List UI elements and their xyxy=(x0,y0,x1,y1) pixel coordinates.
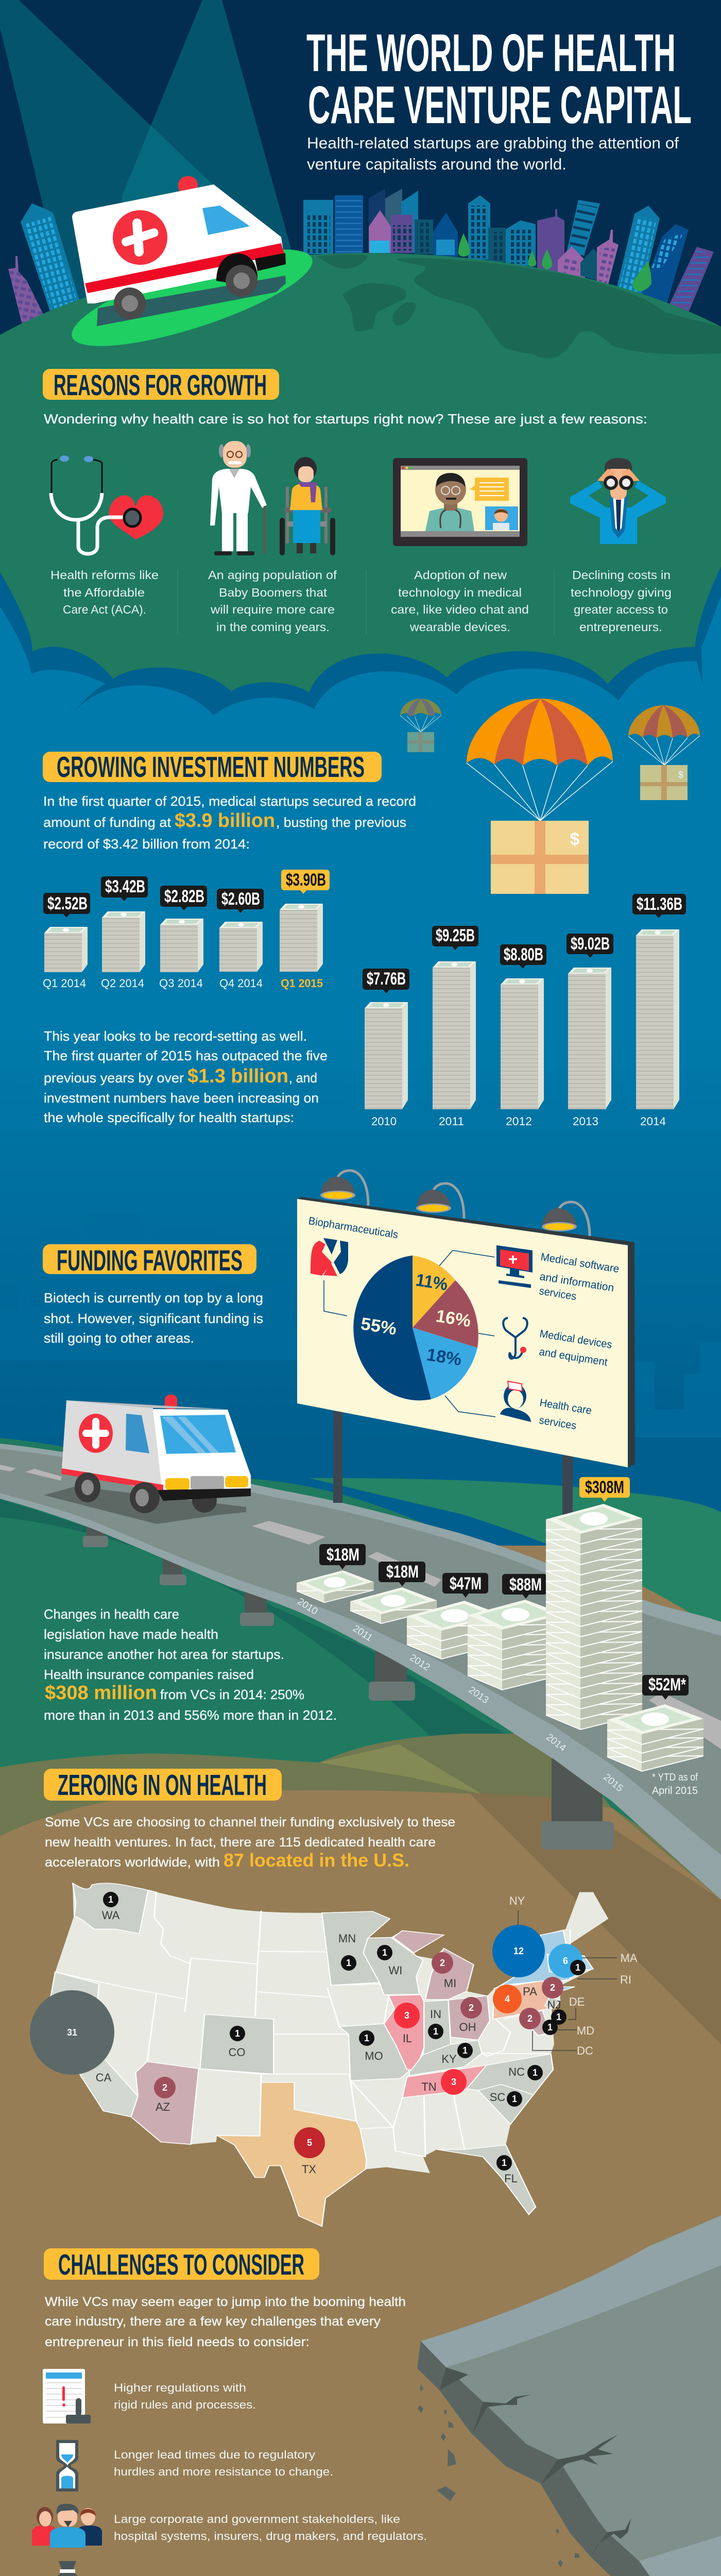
chart: annual funding stacks: 2010 xyxy=(371,1115,397,1128)
chart: annual funding stacks: 2012 xyxy=(506,1115,532,1128)
text: stakeholders: Large corporate and government stakeholders, like xyxy=(114,2513,400,2526)
paragraph: 87 located in the U.S. xyxy=(224,1850,409,1871)
text: regulations: rigid rules and processes. xyxy=(114,2398,256,2411)
state count bubbles: 1 xyxy=(502,2158,507,2168)
heading badge xyxy=(43,751,382,784)
heading badge: CHALLENGES TO CONSIDER xyxy=(58,2248,304,2281)
section: reasons for growth xyxy=(43,369,672,634)
chart: annual funding stacks xyxy=(363,894,686,1128)
section: growing investment numbers xyxy=(43,699,700,1128)
paragraph 1: In the first quarter of 2015, medical startups secured a record xyxy=(43,793,416,809)
state labels xyxy=(96,1894,638,2185)
state count bubbles: 1 xyxy=(364,2033,369,2043)
state count bubbles: 1 xyxy=(575,1962,580,1973)
bubble 52M: $52M* xyxy=(648,1675,686,1694)
text: lead times: hurdles and more resistance to change. xyxy=(114,2465,333,2478)
section: zeroing in on health xyxy=(30,1769,638,2226)
text: lead times: Longer lead times due to regulatory xyxy=(114,2448,315,2461)
paragraph: insurance funding: more than in 2013 and 556% more than in 2012. xyxy=(44,1707,337,1723)
stack 2012 xyxy=(407,1601,503,1659)
state labels: DE xyxy=(569,1995,585,2008)
intro text: Wondering why health care is so hot for startups right now? These are just a few reasons: xyxy=(44,411,647,427)
bubble 18M second xyxy=(379,1562,425,1586)
label: biopharmaceuticals xyxy=(307,1215,399,1276)
pillars under road xyxy=(83,1522,614,1850)
state labels: IN xyxy=(430,2008,441,2021)
reason captions: will require more care xyxy=(210,603,335,616)
icon: hourglass xyxy=(56,2440,78,2492)
paragraph 1: , busting the previous xyxy=(276,815,406,830)
paragraph: new health ventures. In fact, there are 115 dedicated health care xyxy=(45,1835,436,1850)
chart: annual funding stacks: $7.76B xyxy=(367,969,406,989)
label: medical devices: Medical devices xyxy=(539,1328,613,1351)
paragraph 1: $3.9 billion xyxy=(175,810,275,832)
panel: reasons background green xyxy=(0,361,721,721)
continents xyxy=(317,255,721,356)
falling rock debris xyxy=(418,2384,580,2567)
paragraph: insurance funding: from VCs in 2014: 250% xyxy=(160,1687,304,1702)
state count bubbles: 1 xyxy=(547,2022,553,2032)
pie chart: 55% xyxy=(359,1314,398,1339)
state count bubbles: 5 xyxy=(307,2138,312,2148)
state count bubbles: 3 xyxy=(404,2010,409,2021)
lamps xyxy=(320,1171,590,1237)
state labels: AZ xyxy=(156,2100,170,2113)
paragraph xyxy=(45,1815,455,1871)
state count bubbles: 4 xyxy=(505,1994,510,2004)
road xyxy=(0,1444,721,1900)
chart: quarterly funding stacks: $2.60B xyxy=(221,889,260,909)
reason captions: Care Act (ACA). xyxy=(63,603,146,616)
paragraph: care industry, there are a few key challenges that every xyxy=(45,2314,381,2329)
state labels: WI xyxy=(389,1964,402,1977)
bubble 88M xyxy=(502,1574,547,1599)
state labels: MI xyxy=(444,1977,456,1990)
cloud scallops dark layer xyxy=(0,567,721,747)
cliff: broken road xyxy=(417,2215,721,2576)
chart: quarterly funding stacks: Q2 2014 xyxy=(101,977,144,990)
paragraph 2: $1.3 billion xyxy=(187,1065,288,1087)
state labels: RI xyxy=(620,1973,631,1986)
chart: annual funding stacks: 2013 xyxy=(573,1115,598,1128)
chart: quarterly funding stacks: Q1 2015 xyxy=(281,977,323,990)
bubble 47M: $47M xyxy=(450,1574,482,1594)
state labels: MD xyxy=(577,2024,594,2037)
text: lead times xyxy=(114,2448,333,2478)
paragraph: insurance funding: $308 million xyxy=(45,1682,157,1704)
chart: quarterly funding stacks: $3.42B xyxy=(105,877,145,896)
state count bubbles: 2 xyxy=(162,2082,167,2093)
heading badge: FUNDING FAVORITES xyxy=(57,1244,243,1277)
label: medical software: and information xyxy=(539,1270,615,1294)
paragraph: Biotech is currently on top by a long xyxy=(44,1290,263,1306)
title xyxy=(306,23,692,134)
bubble 47M xyxy=(442,1573,488,1598)
state labels: MN xyxy=(338,1932,356,1945)
paragraph 1 xyxy=(43,793,416,852)
heading badge: GROWING INVESTMENT NUMBERS xyxy=(57,751,365,784)
pie chart: 16% xyxy=(435,1306,472,1331)
state labels: DC xyxy=(577,2044,593,2057)
state count bubbles xyxy=(30,1892,586,2171)
year labels on road: 2011 xyxy=(351,1623,374,1643)
text: regulations: Higher regulations with xyxy=(114,2381,246,2394)
reason captions: technology in medical xyxy=(398,586,522,599)
stack 2014 xyxy=(546,1504,642,1730)
heading badge: ZEROING IN ON HEALTH xyxy=(58,1769,267,1802)
stack 2010 xyxy=(297,1570,374,1602)
icon: video chat tablet xyxy=(393,458,527,546)
billboard xyxy=(297,1171,635,1515)
icon: money bag xyxy=(46,2561,88,2576)
ambulance on road xyxy=(44,1395,251,1524)
label: medical software: services xyxy=(538,1285,577,1302)
heading badge xyxy=(44,2248,319,2281)
state labels: FL xyxy=(504,2172,518,2185)
state count bubbles: 1 xyxy=(556,2012,561,2022)
state labels: NY xyxy=(509,1894,525,1907)
section: challenges to consider xyxy=(32,2215,721,2576)
paragraph: shot. However, significant funding is xyxy=(44,1311,263,1326)
city skyline right xyxy=(303,189,714,312)
reason captions: in the coming years. xyxy=(216,620,330,634)
paragraph: entrepreneur in this field needs to consider: xyxy=(45,2335,310,2349)
parachute small left xyxy=(400,699,441,752)
chart: quarterly funding stacks: $2.82B xyxy=(164,887,204,906)
state count bubbles: 2 xyxy=(469,2003,474,2013)
state labels: OH xyxy=(459,2021,476,2033)
state labels: TN xyxy=(421,2080,437,2093)
paragraph: Some VCs are choosing to channel their funding exclusively to these xyxy=(45,1815,455,1829)
text: regulations xyxy=(114,2381,256,2411)
state labels: MA xyxy=(620,1952,638,1964)
paragraph 2: previous years by over xyxy=(44,1070,184,1086)
paragraph: insurance funding xyxy=(44,1606,337,1723)
bubble 88M: $88M xyxy=(509,1575,542,1595)
state labels: NJ xyxy=(547,1998,561,2011)
year labels on road xyxy=(296,1596,625,1794)
state count bubbles: 1 xyxy=(108,1894,113,1905)
label: health care services xyxy=(500,1381,593,1432)
state labels: TX xyxy=(302,2163,316,2176)
state labels: WA xyxy=(102,1909,120,1922)
stack 2015 xyxy=(607,1704,703,1771)
state labels: SC xyxy=(490,2091,505,2104)
heading badge xyxy=(43,1244,256,1277)
reason captions: Health reforms like xyxy=(50,568,159,582)
reason captions: greater access to xyxy=(574,603,668,616)
state labels: CA xyxy=(96,2071,112,2084)
label: medical software: Medical software xyxy=(540,1251,620,1275)
state count bubbles: 1 xyxy=(433,2026,438,2037)
paragraph: insurance funding: insurance another hot area for startups. xyxy=(44,1647,284,1662)
reason captions xyxy=(50,568,672,634)
chart: annual funding stacks: $8.80B xyxy=(504,945,543,964)
sky blue background xyxy=(0,596,721,1546)
reason captions: technology giving xyxy=(571,586,672,599)
footnote xyxy=(652,1772,698,1797)
chart: annual funding stacks: $9.25B xyxy=(436,926,475,945)
state count bubbles: 2 xyxy=(440,1958,445,1968)
paragraph 2: This year looks to be record-setting as well. xyxy=(44,1028,307,1044)
year labels on road: 2012 xyxy=(408,1652,432,1673)
parachute small right xyxy=(628,705,700,800)
label: biopharmaceuticals: Biopharmaceuticals xyxy=(307,1215,399,1241)
chart: quarterly funding stacks: Q1 2014 xyxy=(43,977,86,990)
icon: stakeholders xyxy=(32,2504,102,2548)
icon: regulations document xyxy=(43,2369,91,2424)
state count bubbles: 3 xyxy=(451,2077,456,2087)
section: funding favorites xyxy=(43,1244,263,1346)
text: stakeholders xyxy=(114,2513,427,2543)
reason captions: Declining costs in xyxy=(572,568,671,582)
hills above road xyxy=(0,1438,721,1958)
bubble 308M: $308M xyxy=(585,1478,624,1497)
label: health care services: Health care xyxy=(539,1397,593,1417)
paragraph 2: investment numbers have been increasing on xyxy=(44,1090,319,1106)
reason captions: Baby Boomers that xyxy=(219,586,328,599)
reason captions: Adoption of new xyxy=(414,568,507,582)
pie chart xyxy=(353,1256,478,1400)
text: stakeholders: hospital systems, insurers, drug makers, and regulators. xyxy=(114,2530,427,2543)
paragraph: accelerators worldwide, with xyxy=(45,1855,220,1870)
lower ground: olive and brown hills xyxy=(0,1499,721,2576)
paragraph 2: , and xyxy=(289,1070,317,1086)
parachute large xyxy=(467,699,613,894)
footnote: April 2015 xyxy=(652,1785,698,1797)
subtitle: Health-related startups are grabbing the attention of xyxy=(307,134,679,152)
city silhouette behind billboard xyxy=(0,1214,721,1437)
state count bubbles: 2 xyxy=(550,1982,555,1993)
bubble 18M second: $18M xyxy=(386,1562,419,1582)
year labels on road: 2015 xyxy=(602,1772,625,1794)
chart: annual funding stacks: 2011 xyxy=(439,1115,464,1128)
paragraph: insurance funding: legislation have made health xyxy=(44,1626,218,1642)
paragraph: still going to other areas. xyxy=(44,1330,194,1346)
state count bubbles: 1 xyxy=(512,2094,517,2104)
city skyline left xyxy=(8,204,80,325)
paragraph: insurance funding: Health insurance companies raised xyxy=(44,1667,254,1682)
chart: annual funding stacks: 2014 xyxy=(640,1115,666,1128)
parachute large: $ xyxy=(570,829,580,849)
parachute small right: $ xyxy=(678,770,683,780)
subtitle: venture capitalists around the world. xyxy=(307,155,566,173)
chart: annual funding stacks: $11.36B xyxy=(637,894,682,914)
ambulance with green ring xyxy=(63,176,321,365)
state labels: MO xyxy=(365,2049,383,2062)
year labels on road: 2014 xyxy=(544,1732,568,1754)
paragraph 2: The first quarter of 2015 has outpaced the five xyxy=(44,1048,328,1063)
state count bubbles: 12 xyxy=(513,1946,524,1956)
state labels: CO xyxy=(229,2046,245,2059)
state count bubbles: 6 xyxy=(563,1956,568,1966)
bubble 52M xyxy=(642,1675,689,1700)
stack 2013 xyxy=(468,1600,564,1690)
label: medical devices xyxy=(503,1318,613,1368)
paragraph 1: amount of funding at xyxy=(43,815,171,830)
paragraph xyxy=(44,1290,263,1346)
chart: quarterly funding stacks: $3.90B xyxy=(286,870,326,890)
chart: annual funding stacks: $9.02B xyxy=(571,934,610,954)
icon: elderly man and woman in wheelchair xyxy=(210,441,335,555)
state count bubbles: 1 xyxy=(346,1958,351,1968)
paragraph 2: the whole specifically for health startups: xyxy=(44,1110,294,1125)
bubble 18M: $18M xyxy=(327,1545,359,1565)
state labels: KY xyxy=(441,2053,457,2065)
reason captions: the Affordable xyxy=(63,586,145,599)
leader lines xyxy=(518,1910,617,2050)
paragraph xyxy=(45,2295,406,2349)
state labels: NC xyxy=(508,2065,525,2078)
icon: stethoscope and heart xyxy=(51,455,163,554)
label: medical devices: and equipment xyxy=(538,1346,608,1368)
chart: quarterly funding stacks xyxy=(43,870,330,990)
background: night sky xyxy=(0,0,721,371)
reason captions: entrepreneurs. xyxy=(579,620,662,634)
stack 2011 xyxy=(350,1587,437,1623)
label: medical software xyxy=(496,1245,620,1302)
pie chart: 18% xyxy=(425,1345,463,1370)
reason captions: An aging population of xyxy=(208,568,337,582)
state labels: IL xyxy=(403,2032,412,2045)
heading badge xyxy=(43,369,279,402)
year labels on road: 2010 xyxy=(296,1596,319,1617)
year labels on road: 2013 xyxy=(467,1685,490,1706)
heading badge: REASONS FOR GROWTH xyxy=(54,369,267,402)
state count bubbles: 31 xyxy=(67,2027,77,2038)
cash chart: health insurance funding xyxy=(296,1477,703,1797)
state count bubbles: 1 xyxy=(382,1947,387,1958)
heading badge xyxy=(44,1769,282,1802)
header scene xyxy=(0,0,721,577)
pie chart: 11% xyxy=(415,1270,449,1295)
footnote: * YTD as of xyxy=(652,1772,698,1783)
map: US accelerators xyxy=(30,1883,638,2226)
chart: quarterly funding stacks: $2.52B xyxy=(47,894,88,913)
bubble 18M xyxy=(319,1544,366,1569)
globe xyxy=(0,253,721,577)
paragraph 1: record of $3.42 billion from 2014: xyxy=(43,836,250,852)
chart: quarterly funding stacks: Q3 2014 xyxy=(159,977,203,990)
subtitle xyxy=(307,134,679,173)
state count bubbles: 1 xyxy=(235,2028,240,2039)
spotlights xyxy=(0,0,294,330)
paragraph: insurance funding: Changes in health care xyxy=(44,1606,179,1622)
chart: quarterly funding stacks: Q4 2014 xyxy=(219,977,263,990)
paragraph: While VCs may seem eager to jump into the booming health xyxy=(45,2295,406,2309)
connector lines xyxy=(324,1250,495,1417)
state count bubbles: 1 xyxy=(462,2045,468,2056)
reason captions: wearable devices. xyxy=(409,620,510,634)
state count bubbles: 2 xyxy=(527,2013,533,2024)
state labels: PA xyxy=(523,1985,537,1998)
bubble 308M xyxy=(579,1477,630,1502)
icon: man with binoculars xyxy=(570,458,666,544)
paragraph 2 xyxy=(44,1028,328,1125)
state count bubbles: 1 xyxy=(533,2067,538,2078)
reason captions: care, like video chat and xyxy=(391,603,529,616)
label: health care services: services xyxy=(538,1414,577,1432)
